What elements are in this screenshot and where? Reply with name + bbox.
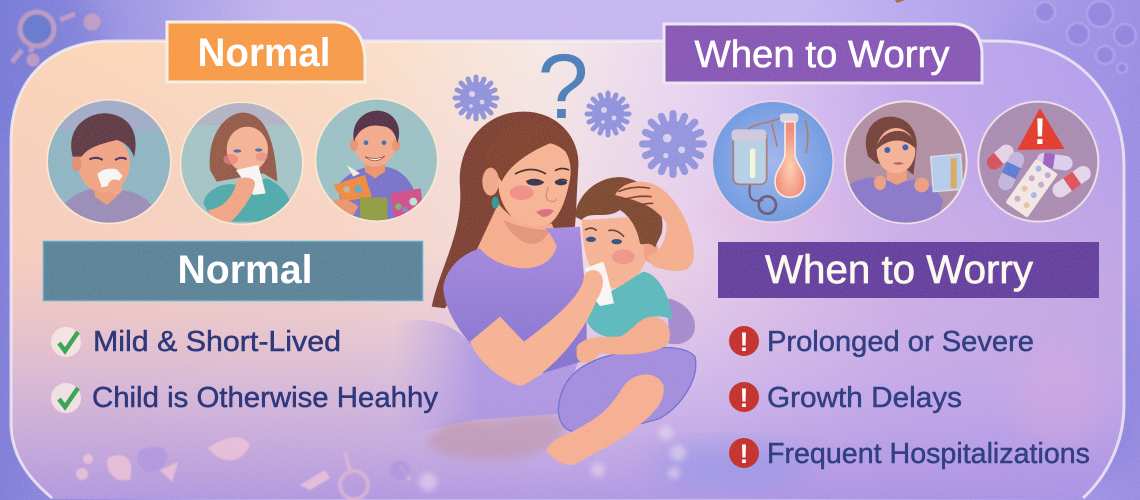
icons: normal symptom circles (46, 98, 439, 227)
child's cheek (612, 249, 635, 264)
list: normal signs (51, 326, 439, 414)
tab: When to Worry: When to Worry (694, 34, 950, 76)
tissue (585, 262, 614, 306)
child's shirt (587, 272, 673, 338)
icon: warning triangle and pills: ! (1034, 111, 1046, 152)
icon: boy with tissue boxes (315, 98, 439, 222)
child's head (582, 217, 650, 288)
icon: warning triangle and pills (978, 102, 1098, 222)
mother's cheek (510, 185, 534, 200)
icon: virus small right (587, 93, 629, 135)
mother's arm on head (615, 182, 694, 271)
item: frequent hospitalizations: Frequent Hospitalizations (767, 438, 1090, 470)
child's ear (644, 240, 658, 263)
mother's back hair (432, 112, 578, 308)
molecule decoration top right (1035, 1, 1136, 73)
icon: IV bag and flask (712, 101, 833, 222)
icon: girl with tissue (180, 101, 304, 225)
item: mild and short-lived: Mild & Short-Lived (93, 326, 341, 358)
tab: Normal (167, 22, 365, 82)
item: prolonged or severe: ! (740, 327, 748, 357)
child's arm (577, 317, 670, 363)
item: growth delays: ! (740, 383, 748, 413)
header bar: When to Worry: When to Worry (765, 248, 1033, 292)
header bar: When to Worry (718, 242, 1099, 298)
header bar: Normal: Normal (178, 248, 312, 292)
list: worry signs (729, 326, 1090, 470)
mother's eyes (515, 168, 569, 202)
mother's fingers (618, 187, 653, 207)
mother's neck and chest (477, 203, 562, 275)
molecule decoration top left (12, 12, 98, 64)
tab: Normal: Normal (198, 31, 330, 75)
child's leg (546, 375, 664, 465)
child's trousers (558, 347, 696, 432)
illustration: mother and child (393, 112, 696, 465)
tab: When to Worry (664, 24, 982, 83)
icon: boy with tissue (46, 99, 173, 227)
item: frequent hospitalizations: ! (740, 439, 748, 469)
icon: worried girl with chart (845, 101, 967, 227)
mother's face (498, 143, 571, 228)
mother's mouth (536, 209, 554, 217)
child's eyes (585, 228, 624, 244)
child's hair (575, 177, 662, 247)
item: prolonged or severe: Prolonged or Severe (767, 326, 1034, 358)
header bar: Normal (44, 242, 422, 300)
mother's lap (393, 320, 580, 437)
icons: worry circles (712, 101, 1098, 227)
mother's forearm (470, 270, 603, 386)
icon: virus large (643, 114, 703, 174)
icon: virus small left (455, 77, 497, 119)
mother's dress (443, 227, 587, 380)
item: child is otherwise healthy: Child is Otherwise Heahhy (92, 382, 439, 414)
item: growth delays: Growth Delays (767, 382, 962, 414)
panel decoration: bottom left molecules (76, 437, 410, 499)
bokeh lights (419, 426, 686, 491)
question mark: ? (537, 36, 589, 138)
top stray mark (895, 0, 905, 3)
blanket (427, 412, 567, 459)
earring (492, 197, 499, 209)
mother's ear (482, 168, 499, 196)
mother's fringe (483, 120, 577, 182)
child's cushion (668, 298, 695, 344)
